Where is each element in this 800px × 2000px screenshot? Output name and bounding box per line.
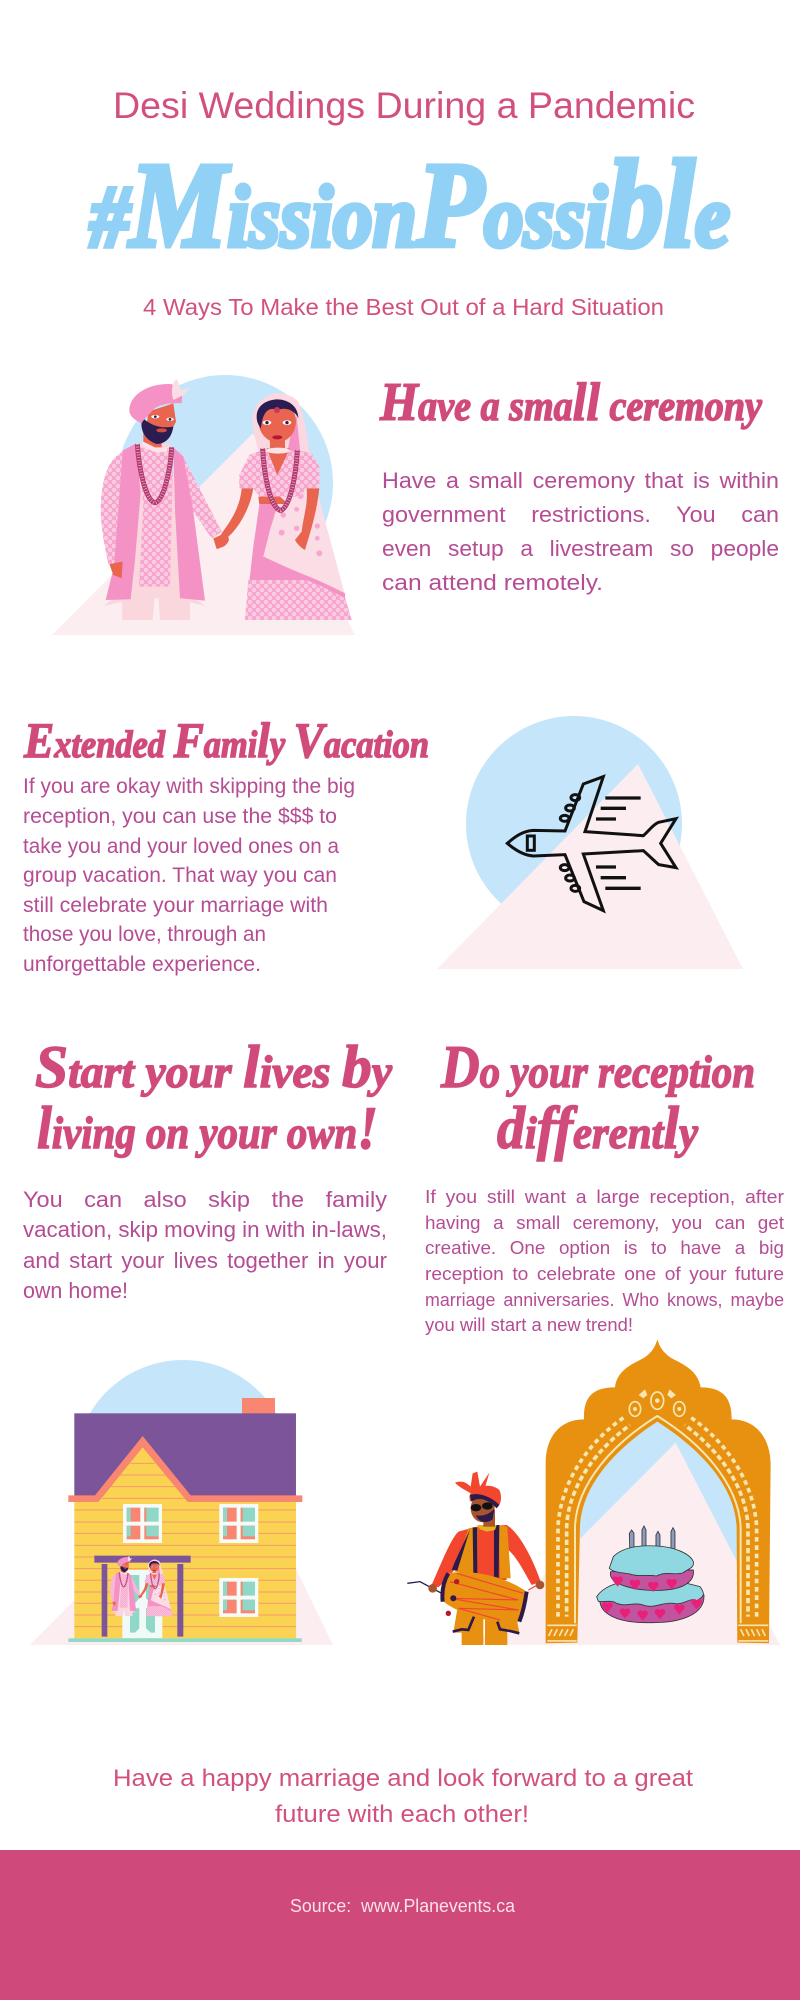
heading: reception: Do your reception xyxy=(440,1034,755,1100)
closing message: future with each other! xyxy=(275,1801,529,1828)
heading: reception xyxy=(440,1034,755,1161)
illustration: reception arch, cake and drummer xyxy=(407,1339,780,1645)
heading: live on your own: Start your lives by xyxy=(35,1034,393,1100)
text: family vacation: still celebrate your marriage with xyxy=(23,894,328,917)
heading: small ceremony: Have a small ceremony xyxy=(379,372,762,432)
text: family vacation: group vacation. That way you can xyxy=(23,864,337,887)
text: small ceremony xyxy=(382,468,779,595)
text: small ceremony: can attend remotely. xyxy=(382,570,603,595)
footer band xyxy=(0,1850,800,2000)
closing message: Have a happy marriage and look forward to a great xyxy=(113,1765,693,1792)
closing message xyxy=(113,1765,693,1828)
text: family vacation: unforgettable experience. xyxy=(23,953,261,976)
text: live on your own: own home! xyxy=(23,1278,128,1303)
text: live on your own: You can also skip the family xyxy=(23,1187,387,1212)
subtitle: 4 Ways To Make the Best Out of a Hard Situation xyxy=(143,294,664,320)
illustration: airplane xyxy=(437,716,743,969)
icon: cake xyxy=(597,1526,704,1623)
text: family vacation: take you and your loved ones on a xyxy=(23,835,339,858)
text: reception xyxy=(425,1187,784,1335)
illustration: house xyxy=(30,1360,333,1645)
text: small ceremony: government restrictions. You can xyxy=(382,502,779,527)
header band: title: Desi Weddings During a Pandemic xyxy=(113,85,695,126)
text: live on your own: vacation, skip moving in with in-laws, xyxy=(23,1217,387,1242)
heading: live on your own: living on your own! xyxy=(37,1095,378,1161)
source line: Source: www.Planevents.ca xyxy=(290,1896,516,1916)
text: family vacation: If you are okay with skipping the big xyxy=(23,775,355,798)
heading: live on your own xyxy=(35,1034,393,1161)
text: reception: creative. One option is to have a big xyxy=(425,1238,784,1258)
heading: reception: differently xyxy=(497,1095,699,1161)
hashtag headline: #MissionPossible xyxy=(89,136,730,274)
text: live on your own xyxy=(23,1187,387,1303)
icon: dhol drummer xyxy=(407,1472,544,1645)
illustration: wedding couple xyxy=(52,375,355,635)
text: family vacation: those you love, through an xyxy=(23,923,266,946)
heading: family vacation: Extended Family Vacation xyxy=(23,712,429,768)
text: small ceremony: even setup a livestream so people xyxy=(382,536,779,561)
text: reception: reception to celebrate one of your future xyxy=(425,1264,784,1284)
icon: arch xyxy=(546,1339,771,1643)
text: reception: having a small ceremony, you can get xyxy=(425,1213,784,1233)
text: reception: marriage anniversaries. Who knows, maybe xyxy=(425,1290,784,1310)
text: family vacation: reception, you can use the $$$ to xyxy=(23,805,337,828)
text: live on your own: and start your lives together in your xyxy=(23,1248,387,1273)
text: family vacation xyxy=(23,775,355,976)
text: reception: you will start a new trend! xyxy=(425,1315,633,1335)
text: small ceremony: Have a small ceremony that is within xyxy=(382,468,779,493)
text: reception: If you still want a large reception, after xyxy=(425,1187,784,1207)
